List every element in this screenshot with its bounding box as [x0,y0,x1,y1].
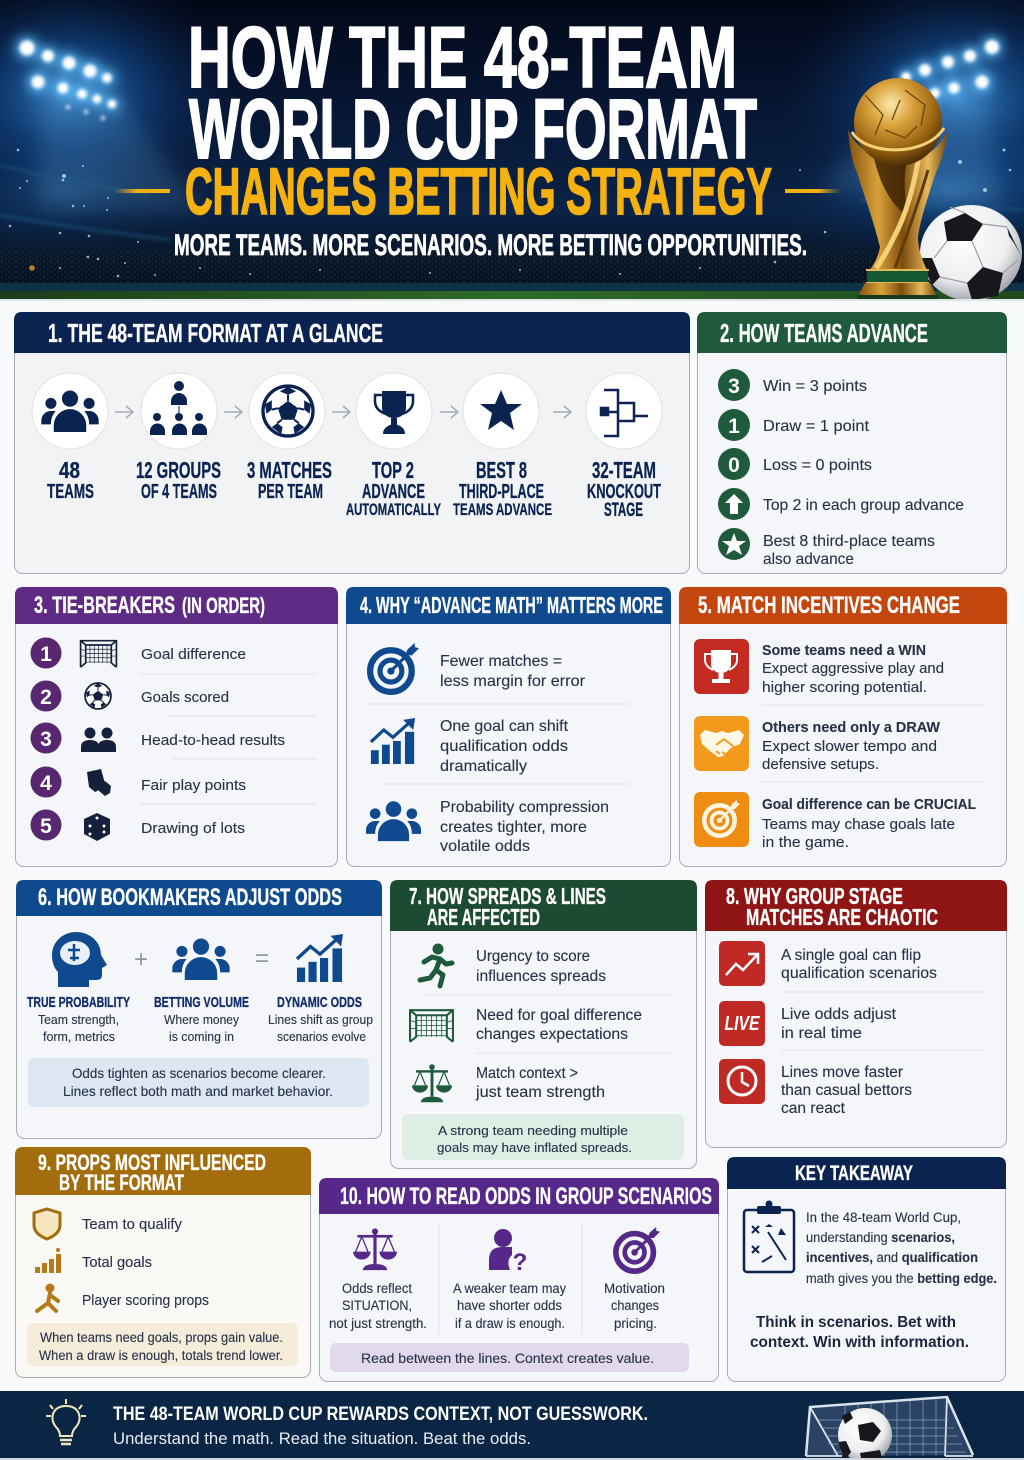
heading 4: 4. WHY “ADVANCE MATH” MATTERS MORE [360,592,663,618]
panel 3: tie-breakers [15,587,338,866]
takeaway slogan: context. Win with information. [750,1334,969,1351]
callout 7: goals may have inflated spreads. [437,1140,632,1155]
text block 10: changes [611,1298,659,1313]
step labels: 32-TEAM [592,457,656,483]
icon: target [616,1227,660,1271]
number badges [30,638,62,840]
panel 8: chaotic group stage [705,880,1007,1148]
text block 8: A single goal can flip [781,947,921,964]
step labels: TEAMS ADVANCE [453,500,552,519]
heading takeaway: KEY TAKEAWAY [795,1162,913,1185]
badge numbers: 5 [40,815,52,838]
text block 7: Match context > [476,1065,578,1082]
icon: person question: ? [513,1249,527,1276]
panel 10: reading odds [319,1178,719,1382]
tie-breaker list: Fair play points [141,777,246,794]
text block 5: in the game. [762,834,849,851]
formula labels: TRUE PROBABILITY [27,994,130,1011]
step labels: ADVANCE [362,481,425,503]
text block 8: can react [781,1100,846,1117]
step labels: BEST 8 [476,457,527,483]
light beams [40,60,1000,210]
step labels: STAGE [604,500,643,521]
tie-breaker list: Head-to-head results [141,732,285,749]
text block 10: SITUATION, [342,1298,412,1313]
icon: scales [353,1228,397,1270]
text block 4: One goal can shift [440,718,569,735]
stand tiers [0,165,1024,240]
badges [718,369,750,560]
heading 3: 3. TIE-BREAKERS [34,592,175,619]
text block 5: higher scoring potential. [762,679,927,696]
text block 5: Goal difference can be CRUCIAL [762,796,976,813]
callout 6 [28,1058,369,1107]
icon: goal [410,1010,453,1042]
takeaway slogan [750,1314,969,1351]
step labels: 12 GROUPS [136,457,221,483]
takeaway text: understanding scenarios, [806,1230,955,1245]
text block 7: influences spreads [476,968,606,985]
formula labels [27,994,362,1011]
icon: tactics clipboard [744,1200,794,1272]
takeaway slogan: Think in scenarios. Bet with [756,1314,956,1331]
equals sign: = [255,945,269,972]
icon: bracket [601,390,648,436]
panel 6: bookmakers [16,880,382,1138]
formula descriptions: Lines shift as group [268,1013,373,1027]
icon: people [172,938,230,980]
icon: star [480,390,522,430]
callout 7 [402,1114,684,1160]
callout 9: When a draw is enough, totals trend lower. [39,1348,283,1363]
step labels: PER TEAM [258,481,323,503]
text block 10: A weaker team may [453,1281,566,1296]
footer text: Understand the math. Read the situation. Beat the odds. [113,1430,531,1448]
heading 1: 1. THE 48-TEAM FORMAT AT A GLANCE [48,318,383,348]
icon: live tile [719,1001,765,1046]
text block 8: in real time [781,1025,862,1042]
rule list: also advance [763,551,854,568]
callout 9: When teams need goals, props gain value. [40,1330,283,1345]
step labels: TEAMS [47,481,94,503]
icon: groups [150,381,207,435]
icon: cards [87,769,111,796]
panel 7: spreads and lines [390,880,697,1168]
text block 8: qualification scenarios [781,965,937,982]
text block 10: not just strength. [329,1316,427,1331]
text block 7: Need for goal difference [476,1007,642,1024]
text block 8: Live odds adjust [781,1006,897,1023]
text block 9: Total goals [82,1255,152,1271]
formula labels: DYNAMIC ODDS [277,994,362,1011]
icon: dice [84,813,110,841]
crowd [0,250,1024,283]
step labels [47,457,661,521]
footer text: THE 48-TEAM WORLD CUP REWARDS CONTEXT, NOT GUESSWORK. [113,1404,648,1425]
icon: trophy [375,391,413,434]
icon: goal with ball [806,1397,973,1460]
panel 4: advance math [346,587,671,866]
trophy [848,78,948,300]
text block 7 [475,948,642,1101]
icon: matches ball [263,386,313,436]
heading 7: ARE AFFECTED [427,904,540,930]
text block 4: qualification odds [440,738,568,755]
right floodlights [898,37,1002,101]
heading 3: (IN ORDER) [182,593,265,618]
badge numbers: 2 [40,686,52,709]
text block 4: dramatically [440,758,527,775]
text block 10 [329,1281,665,1331]
text block 5 [762,642,976,851]
callout 10 [330,1343,689,1372]
text block 7: changes expectations [476,1026,628,1043]
formula descriptions: scenarios evolve [277,1030,366,1044]
plus sign: + [134,946,148,973]
rule list: Best 8 third-place teams [763,533,935,550]
icon: brain head [52,932,107,987]
text block 10: Motivation [604,1281,665,1296]
title [114,10,841,228]
panel 1: format at a glance [14,312,690,574]
text block 5: Expect slower tempo and [762,738,937,755]
icon: target tile [694,792,749,847]
soccer ball [920,205,1022,301]
step circles [32,373,662,449]
text block 4: less margin for error [440,673,586,690]
hero banner [0,0,1024,301]
text block 5: Some teams need a WIN [762,642,926,659]
text block 10: have shorter odds [457,1298,562,1313]
text block 10: Odds reflect [342,1281,412,1296]
icon: light bulb [46,1399,86,1444]
tie-breaker list: Drawing of lots [141,820,245,837]
step labels: 48 [59,457,80,483]
icon: trend tile [719,941,765,986]
text block 10: if a draw is enough. [455,1316,565,1331]
step labels: KNOCKOUT [587,481,661,503]
icon: target [370,643,419,692]
panel: key takeaway [727,1157,1006,1382]
text block 9: Player scoring props [82,1293,209,1309]
text block 7: just team strength [475,1084,605,1101]
tie-breaker list: Goals scored [141,689,229,706]
heading 9 [38,1150,266,1195]
icon: shield [34,1209,60,1239]
text block 4 [440,653,609,855]
step labels: TOP 2 [372,457,414,483]
icon: scales [412,1064,452,1102]
pitch grass [0,291,1024,300]
rule list: Win = 3 points [763,378,867,395]
heading 7: 7. HOW SPREADS & LINES [409,883,606,909]
takeaway text: In the 48-team World Cup, [806,1210,961,1225]
text block 4: Fewer matches = [440,653,562,670]
icon: ball [85,683,111,709]
takeaway text [806,1210,997,1286]
panel 2: how teams advance [697,312,1007,574]
heading 6: 6. HOW BOOKMAKERS ADJUST ODDS [38,884,342,911]
text block 8: than casual bettors [781,1082,912,1099]
step labels: AUTOMATICALLY [346,500,441,519]
callout 7: A strong team needing multiple [438,1123,628,1138]
formula labels: BETTING VOLUME [154,994,249,1011]
badge glyphs: 1 [728,415,740,438]
step labels: 3 MATCHES [247,457,332,483]
text block 5: defensive setups. [762,756,879,773]
heading 10: 10. HOW TO READ ODDS IN GROUP SCENARIOS [340,1183,712,1210]
arrows [115,406,571,418]
footer text [113,1404,648,1448]
icon: teams [41,390,99,432]
heading 8: MATCHES ARE CHAOTIC [746,904,938,930]
badge numbers: 1 [40,643,52,666]
rule list [763,378,964,568]
callout 6: Lines reflect both math and market behavior. [63,1083,333,1099]
tie-breaker list [141,646,285,837]
panel 9: props [15,1147,311,1378]
text block 4: volatile odds [440,838,530,855]
left floodlights [16,37,119,111]
formula descriptions [38,1013,373,1044]
heading 8 [726,883,938,930]
icon: chart [371,718,415,764]
text block 9: Team to qualify [82,1217,183,1233]
footer band [0,1391,1024,1460]
step labels: OF 4 TEAMS [141,481,217,503]
icon: live tile: LIVE [724,1013,760,1035]
formula descriptions: form, metrics [43,1030,115,1044]
text block 9 [82,1217,209,1309]
icon: red trophy tile [694,639,749,694]
icon: bars [35,1248,61,1273]
text block 5: Expect aggressive play and [762,660,944,677]
text block 8 [781,947,937,1117]
heading 9: BY THE FORMAT [59,1170,184,1195]
icon: runner [420,946,452,986]
badge numbers: 3 [40,728,52,751]
rule list: Top 2 in each group advance [763,497,964,514]
icon: two people [81,728,116,752]
text block 5: Others need only a DRAW [762,719,941,736]
title: HOW THE 48-TEAM [188,10,737,106]
icon: handshake tile [694,716,749,771]
text block 10: pricing. [614,1316,657,1331]
icon: people [366,801,421,841]
callout 6: Odds tighten as scenarios become clearer. [72,1065,326,1081]
icon: goal net [81,641,116,667]
rule list: Loss = 0 points [763,457,872,474]
crowd sparkle [9,148,1011,277]
takeaway text: math gives you the betting edge. [806,1271,997,1286]
text block 7: Urgency to score [476,948,590,965]
badge numbers [40,643,52,838]
rule list: Draw = 1 point [763,418,870,435]
heading 7 [409,883,606,930]
icon: person question [489,1229,527,1276]
badge glyphs: 3 [728,375,740,398]
heading 9: 9. PROPS MOST INFLUENCED [38,1150,266,1175]
badge glyphs: 0 [728,454,740,477]
icon: player [37,1286,58,1311]
text block 4: Probability compression [440,799,609,816]
panel 5: match incentives [679,587,1007,866]
formula descriptions: Where money [164,1013,240,1027]
badge glyphs [722,375,746,555]
tie-breaker list: Goal difference [141,646,246,663]
callout 10: Read between the lines. Context creates value. [361,1350,654,1366]
text block 5: Teams may chase goals late [762,816,955,833]
formula descriptions: is coming in [169,1030,234,1044]
badge numbers: 4 [40,772,52,795]
icon: chart [297,934,343,982]
text block 4: creates tighter, more [440,819,587,836]
icon: clock tile [719,1059,765,1104]
text block 8: Lines move faster [781,1064,903,1081]
formula descriptions: Team strength, [38,1013,119,1027]
takeaway text: incentives, and qualification [806,1250,978,1265]
step labels: THIRD-PLACE [459,481,544,503]
callout 9 [27,1323,298,1366]
heading 8: 8. WHY GROUP STAGE [726,883,903,909]
